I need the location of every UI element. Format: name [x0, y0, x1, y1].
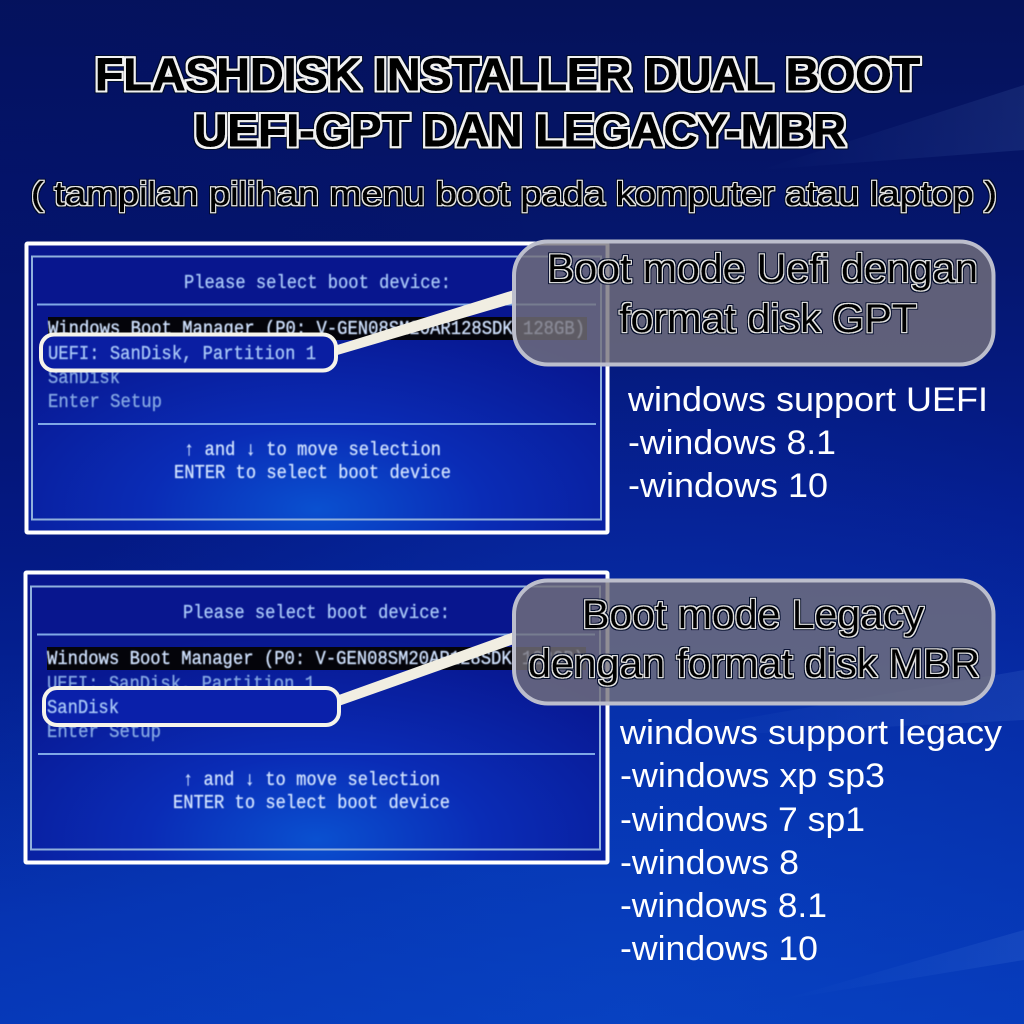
title: UEFI-GPT DAN LEGACY-MBR: [194, 105, 846, 156]
boot menu text: ENTER to select boot device: [173, 792, 450, 814]
boot menu text: Please select boot device:: [184, 272, 451, 294]
highlight: SanDisk row: [44, 688, 339, 725]
Legacy windows list: -windows 10: [620, 930, 818, 968]
UEFI windows list: -windows 10: [628, 467, 828, 505]
panel: UEFI boot screen: [26, 244, 608, 532]
boot menu text: ↑ and ↓ to move selection: [184, 439, 441, 461]
title: [95, 49, 920, 156]
boot menu text: Please select boot device:: [183, 602, 450, 624]
highlight: SanDisk row: SanDisk: [47, 697, 119, 719]
Legacy windows list: -windows xp sp3: [620, 757, 885, 795]
callout: Legacy: dengan format disk MBR: [528, 642, 980, 686]
boot menu text: [48, 272, 585, 484]
boot menu text: Enter Setup: [47, 721, 161, 743]
boot menu text: [47, 602, 584, 814]
boot menu text: ENTER to select boot device: [174, 462, 451, 484]
Legacy windows list: -windows 8: [620, 844, 799, 882]
boot menu text: UEFI: SanDisk, Partition 1: [47, 673, 315, 695]
boot menu text: Windows Boot Manager (P0: V-GEN08SM20AR128SDK 128GB): [48, 318, 585, 340]
boot menu text: Enter Setup: [48, 391, 162, 413]
callout: Legacy: [514, 580, 994, 704]
highlight: UEFI row: [41, 334, 336, 370]
panel: Legacy boot screen: [26, 572, 608, 862]
Legacy windows list: [619, 714, 1002, 968]
UEFI windows list: -windows 8.1: [628, 424, 836, 462]
boot menu text: SanDisk: [48, 367, 120, 389]
callout: UEFI: Boot mode Uefi dengan: [547, 247, 978, 291]
subtitle: ( tampilan pilihan menu boot pada komputer atau laptop ): [31, 175, 997, 212]
Legacy windows list: -windows 8.1: [620, 887, 827, 925]
highlight: UEFI row: UEFI: SanDisk, Partition 1: [48, 343, 316, 365]
UEFI windows list: windows support UEFI: [627, 381, 988, 419]
selected row bar: [48, 317, 587, 340]
callout: UEFI: format disk GPT: [619, 297, 917, 341]
connector line: [336, 632, 514, 707]
UEFI windows list: [627, 381, 988, 505]
title: FLASHDISK INSTALLER DUAL BOOT: [95, 49, 920, 100]
Legacy windows list: -windows 7 sp1: [620, 801, 865, 839]
callout: Legacy: Boot mode Legacy: [582, 593, 924, 637]
boot menu text: Windows Boot Manager (P0: V-GEN08SM20AR128SDK 128GB): [47, 648, 584, 670]
connector line: [334, 290, 514, 356]
callout: UEFI: [514, 242, 994, 364]
selected row bar: [47, 647, 586, 670]
boot menu text: ↑ and ↓ to move selection: [183, 769, 440, 791]
Legacy windows list: windows support legacy: [619, 714, 1002, 752]
